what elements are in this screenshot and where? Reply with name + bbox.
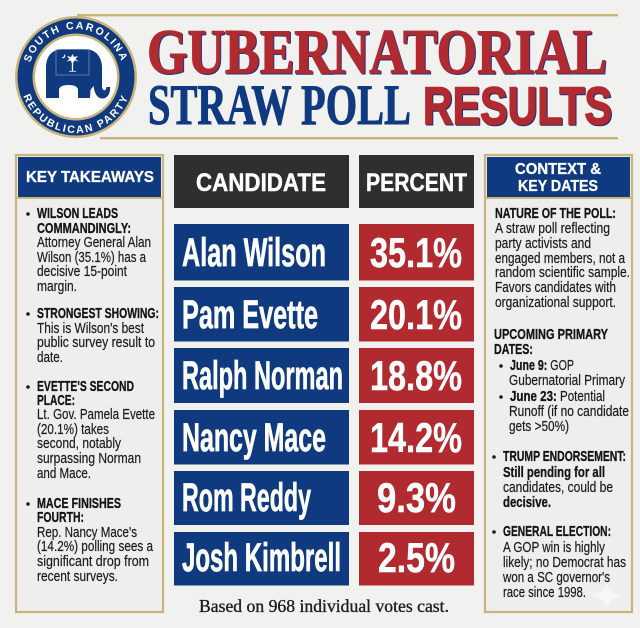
context header: KEY DATES bbox=[518, 178, 598, 195]
icon: sparkle watermark bbox=[592, 583, 622, 608]
takeaway: evette's second place: PLACE: bbox=[37, 393, 75, 409]
row: Nancy Mace: 14.2% bbox=[370, 414, 462, 461]
takeaway: mace finishes fourth: FOURTH: bbox=[37, 510, 84, 526]
row: Ralph Norman: 18.8% bbox=[370, 352, 462, 399]
context: nature of the poll: Favors candidates with bbox=[495, 280, 616, 296]
panel: key takeaways bbox=[16, 155, 163, 612]
takeaway: wilson leads: margin. bbox=[37, 279, 77, 295]
takeaway: mace finishes fourth: significant drop from bbox=[37, 554, 149, 570]
takeaway: evette's second place: Lt. Gov. Pamela Evette bbox=[37, 407, 155, 423]
takeaway: evette's second place: (20.1%) takes bbox=[37, 422, 109, 438]
row: Alan Wilson bbox=[174, 224, 474, 280]
context header bbox=[485, 157, 632, 199]
logo text: south carolina: SOUTH CAROLINA bbox=[24, 22, 127, 62]
context: nature of the poll: A straw poll reflecting bbox=[495, 221, 610, 237]
row: Rom Reddy: 9.3% bbox=[377, 474, 456, 521]
context: upcoming primary dates: UPCOMING PRIMARY bbox=[494, 327, 608, 343]
context: nature of the poll: party activists and bbox=[495, 236, 591, 252]
context: trump endorsement: Still pending for all bbox=[503, 465, 605, 481]
header banner bbox=[77, 14, 618, 139]
takeaway: strongest showing: STRONGEST SHOWING: bbox=[37, 306, 159, 322]
takeaway: wilson leads bbox=[26, 206, 151, 295]
row: Alan Wilson: Alan Wilson bbox=[182, 231, 326, 275]
takeaway: mace finishes fourth bbox=[26, 496, 153, 585]
context: upcoming primary dates: June 23: Potential bbox=[510, 389, 605, 405]
row: Alan Wilson: 35.1% bbox=[370, 229, 462, 276]
context: upcoming primary dates: DATES: bbox=[494, 342, 533, 358]
row: Nancy Mace: Nancy Mace bbox=[182, 416, 326, 460]
row: Pam Evette: 20.1% bbox=[370, 291, 462, 338]
context: trump endorsement: candidates, could be bbox=[503, 480, 613, 496]
context header: CONTEXT & bbox=[515, 161, 601, 178]
context: upcoming primary dates bbox=[494, 327, 629, 435]
context: general election bbox=[492, 524, 626, 601]
takeaway: wilson leads: Wilson (35.1%) has a bbox=[37, 250, 146, 266]
key takeaways header: KEY TAKEAWAYS bbox=[26, 169, 154, 186]
table header: candidate bbox=[174, 155, 349, 208]
takeaway: wilson leads: WILSON LEADS bbox=[37, 206, 118, 222]
context: nature of the poll: organizational support. bbox=[495, 295, 616, 311]
row: Rom Reddy bbox=[174, 471, 474, 525]
takeaway: strongest showing bbox=[26, 306, 159, 366]
table header: percent: PERCENT bbox=[366, 169, 467, 197]
table header: candidate: CANDIDATE bbox=[196, 169, 326, 197]
footnote: Based on 968 individual votes cast. bbox=[199, 596, 449, 616]
takeaway: mace finishes fourth: Rep. Nancy Mace's bbox=[37, 525, 137, 541]
takeaway: evette's second place: and Mace. bbox=[37, 466, 91, 482]
context: trump endorsement bbox=[492, 449, 626, 511]
row: Pam Evette bbox=[174, 287, 474, 342]
takeaway: strongest showing: date. bbox=[37, 350, 63, 366]
context: trump endorsement: decisive. bbox=[503, 495, 551, 511]
logo text: republican party: REPUBLICAN PARTY bbox=[23, 94, 127, 134]
context: general election: won a SC governor's bbox=[502, 570, 610, 586]
takeaway: mace finishes fourth: recent surveys. bbox=[37, 569, 118, 585]
takeaway: mace finishes fourth: MACE FINISHES bbox=[37, 496, 121, 512]
icon: elephant with palmetto flag bbox=[46, 49, 110, 98]
context: general election: A GOP win is highly bbox=[503, 540, 606, 556]
context: general election: race since 1998. bbox=[503, 585, 586, 601]
context: upcoming primary dates: gets >50%) bbox=[509, 419, 569, 435]
row: Josh Kimbrell: 2.5% bbox=[378, 534, 455, 581]
row: Nancy Mace bbox=[174, 410, 474, 464]
takeaway: evette's second place: EVETTE'S SECOND bbox=[37, 379, 134, 395]
context: upcoming primary dates: June 9: GOP bbox=[510, 358, 574, 374]
row: Josh Kimbrell: Josh Kimbrell bbox=[182, 536, 341, 580]
title: straw poll: STRAW POLL bbox=[148, 74, 411, 137]
key takeaways header bbox=[16, 157, 163, 199]
takeaway: evette's second place bbox=[26, 379, 155, 482]
context: nature of the poll bbox=[495, 206, 630, 311]
logo: South Carolina Republican Party seal bbox=[15, 16, 137, 138]
takeaway: mace finishes fourth: (14.2%) polling sees a bbox=[37, 539, 153, 555]
takeaway: strongest showing: public survey result to bbox=[37, 335, 155, 351]
takeaway: evette's second place: surpassing Norman bbox=[37, 451, 141, 467]
panel: context and key dates bbox=[485, 155, 632, 612]
takeaway: evette's second place: second, notably bbox=[37, 436, 122, 452]
table header: percent bbox=[359, 155, 474, 208]
row: Rom Reddy: Rom Reddy bbox=[182, 476, 311, 520]
takeaway: wilson leads: decisive 15-point bbox=[37, 264, 127, 280]
row: Ralph Norman: Ralph Norman bbox=[182, 354, 343, 398]
takeaway: wilson leads: Attorney General Alan bbox=[37, 235, 151, 251]
takeaway: strongest showing: This is Wilson's best bbox=[37, 321, 144, 337]
row: Pam Evette: Pam Evette bbox=[182, 293, 318, 337]
takeaway: wilson leads: COMMANDINGLY: bbox=[37, 221, 131, 237]
